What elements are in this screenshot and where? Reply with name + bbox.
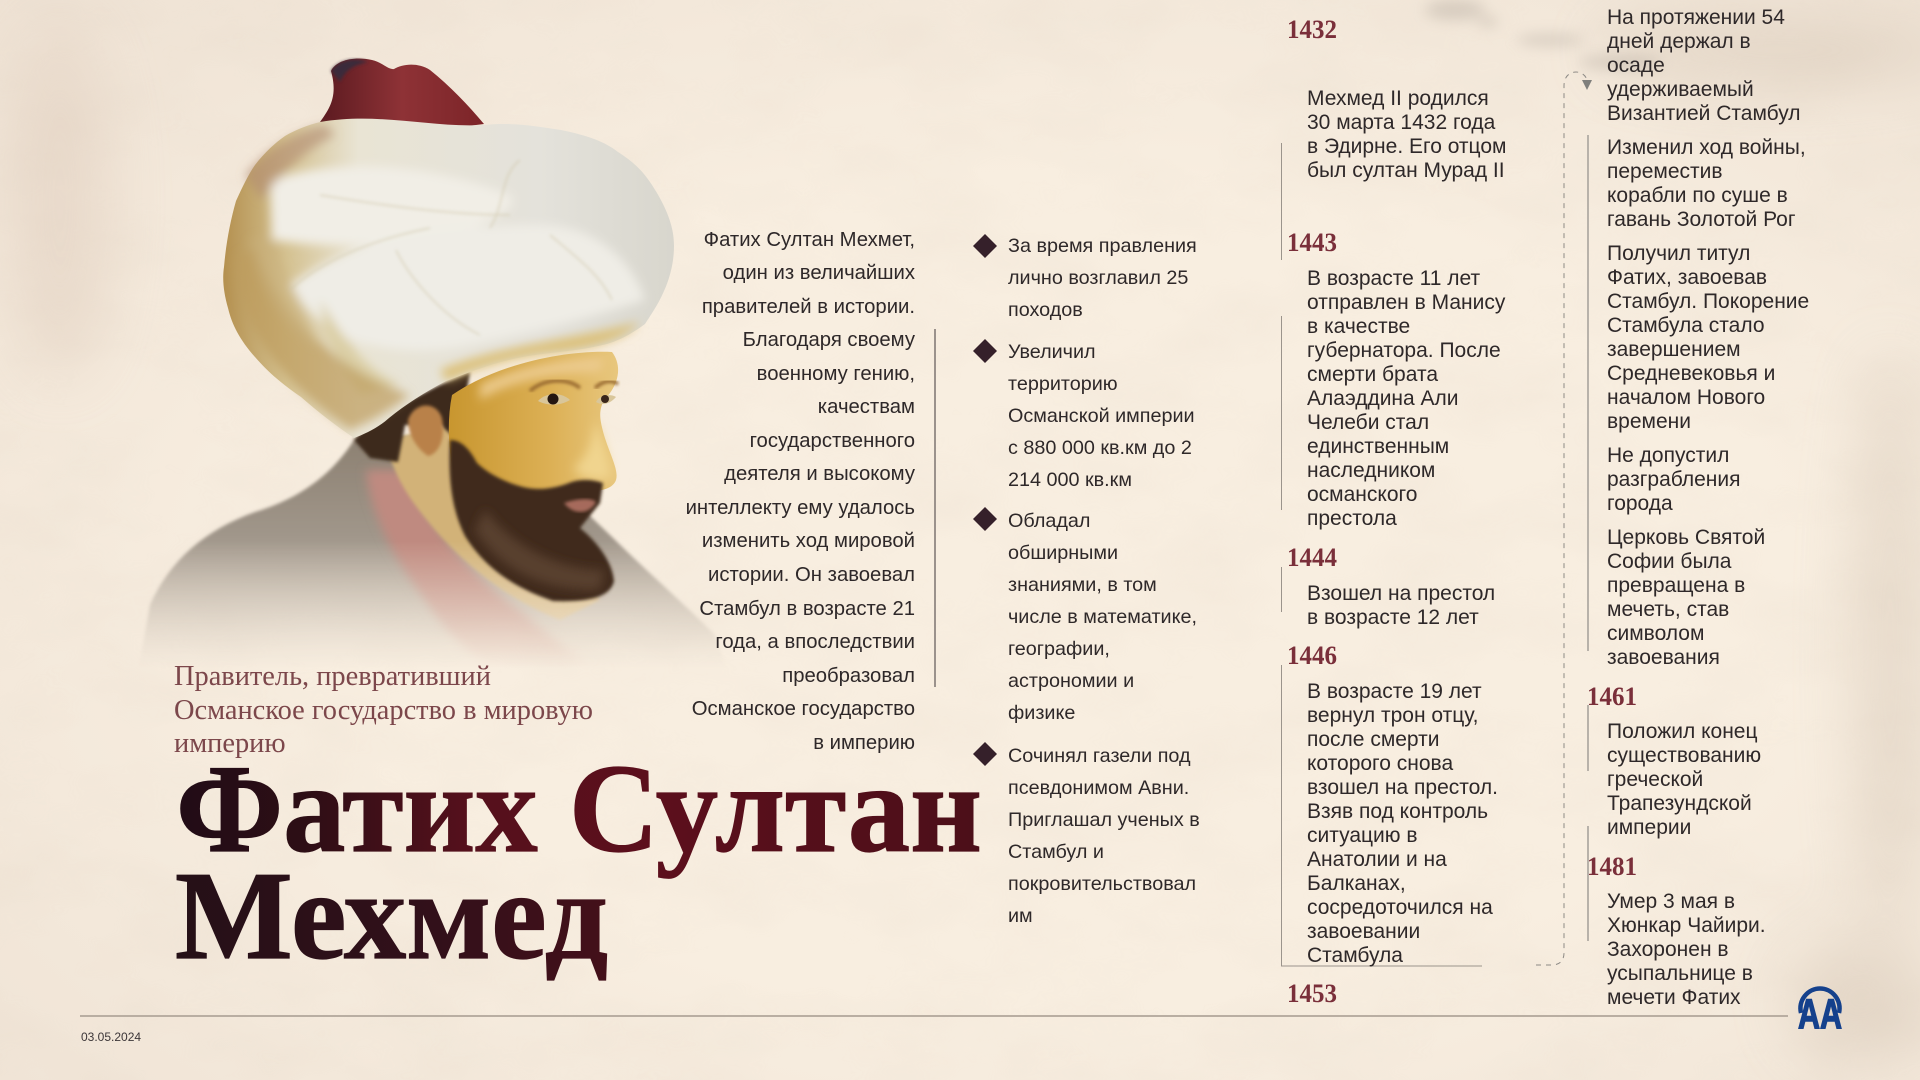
timeline column 2: империи — [1607, 816, 1691, 839]
beard — [450, 440, 614, 601]
bullet 2: территорию — [1008, 373, 1118, 395]
title text: Фатих, завоевав — [1607, 266, 1767, 289]
hat — [320, 58, 484, 132]
timeline column 2 — [1587, 6, 1809, 1009]
intro text: государственного — [750, 430, 915, 452]
subtitle: Османское государство в мировую — [174, 695, 593, 726]
timeline column 1: Балканах, — [1307, 872, 1406, 895]
timeline column 2: Положил конец — [1607, 720, 1758, 743]
intro text: истории. Он завоевал — [708, 564, 915, 586]
hagia sophia text: Софии была — [1607, 550, 1731, 573]
timeline column 1: которого снова — [1307, 752, 1453, 775]
timeline column 1: Челеби стал — [1307, 411, 1429, 434]
bullet 3: географии, — [1008, 638, 1110, 660]
title text — [1607, 242, 1809, 433]
siege text: На протяжении 54 — [1607, 6, 1785, 29]
bullet 3: числе в математике, — [1008, 606, 1197, 628]
timeline column 1: В возрасте 19 лет — [1307, 680, 1482, 703]
title text: Стамбул. Покорение — [1607, 290, 1809, 313]
intro text: Фатих Султан Мехмет, — [704, 228, 915, 250]
timeline column 2: мечети Фатих — [1607, 986, 1741, 1009]
hagia sophia text: завоевания — [1607, 646, 1720, 669]
intro text: Османское государство — [692, 698, 915, 720]
siege text: Византией Стамбул — [1607, 102, 1801, 125]
title: Мехмед — [175, 847, 608, 986]
title: Фатих Султан — [176, 740, 982, 879]
timeline column 1: ситуацию в — [1307, 824, 1418, 847]
timeline column 2: Умер 3 мая в — [1607, 890, 1735, 913]
timeline column 1: Стамбула — [1307, 944, 1403, 967]
timeline column 1: престола — [1307, 507, 1397, 530]
bullet 3 — [973, 507, 1197, 724]
timeline column 2: существованию — [1607, 744, 1761, 767]
bullet 3: физике — [1008, 702, 1075, 724]
dashed arrow — [1536, 72, 1592, 965]
timeline column 2: греческой — [1607, 768, 1703, 791]
eyes — [530, 381, 618, 405]
year 1432: 1432 — [1287, 15, 1337, 44]
timeline column 1: Взяв под контроль — [1307, 800, 1488, 823]
title text: времени — [1607, 410, 1691, 433]
turban — [223, 119, 674, 438]
date: 03.05.2024 — [81, 1030, 141, 1044]
timeline column 1: в Эдирне. Его отцом — [1307, 135, 1506, 158]
intro text — [686, 228, 915, 754]
bullet 3: знаниями, в том — [1008, 574, 1157, 596]
portrait: sultan in turban — [145, 57, 716, 658]
intro text: преобразовал — [782, 665, 915, 687]
intro text: Стамбул в возрасте 21 — [699, 598, 915, 620]
title text: Получил титул — [1607, 242, 1750, 265]
bullet 4: им — [1008, 905, 1033, 927]
bullet 4: покровительствовал — [1008, 873, 1196, 895]
year 1444: 1444 — [1287, 543, 1337, 572]
bullet 4 — [973, 742, 1200, 927]
robe — [145, 426, 716, 658]
intro text: правителей в истории. — [702, 296, 915, 318]
timeline column 1: в возрасте 12 лет — [1307, 606, 1479, 629]
timeline column 2: Захоронен в — [1607, 938, 1729, 961]
looting text: разграбления — [1607, 468, 1740, 491]
timeline column 1: 30 марта 1432 года — [1307, 111, 1495, 134]
hagia sophia text — [1607, 526, 1765, 669]
lips — [564, 499, 596, 512]
timeline column 1: Взошел на престол — [1307, 582, 1495, 605]
ships text: корабли по суше в — [1607, 184, 1788, 207]
timeline column 1: смерти брата — [1307, 363, 1438, 386]
year 1446: 1446 — [1287, 641, 1337, 670]
looting text — [1607, 444, 1740, 515]
timeline column 1: после смерти — [1307, 728, 1440, 751]
timeline column 1: завоевании — [1307, 920, 1420, 943]
bullet 2: с 880 000 кв.км до 2 — [1008, 437, 1192, 459]
siege text — [1607, 6, 1801, 125]
timeline column 2: усыпальнице в — [1607, 962, 1753, 985]
timeline column 1: сосредоточился на — [1307, 896, 1493, 919]
looting text: Не допустил — [1607, 444, 1729, 467]
timeline column 1: единственным — [1307, 435, 1449, 458]
bullet 3: астрономии и — [1008, 670, 1134, 692]
intro text: года, а впоследствии — [715, 631, 915, 653]
subtitle — [174, 661, 593, 759]
intro text: в империю — [813, 732, 915, 754]
timeline column 1: отправлен в Манису — [1307, 291, 1505, 314]
subtitle: Правитель, превративший — [174, 661, 491, 692]
hagia sophia text: превращена в — [1607, 574, 1745, 597]
intro text: один из величайших — [723, 262, 915, 284]
intro text: деятеля и высокому — [724, 463, 915, 485]
timeline column 1: османского — [1307, 483, 1417, 506]
hair — [354, 372, 470, 462]
bullet 1: походов — [1008, 299, 1083, 321]
intro text: качествам — [818, 396, 915, 418]
year 1461: 1461 — [1587, 682, 1637, 711]
timeline column 1: Алаэддина Али — [1307, 387, 1459, 410]
timeline column 2: Хюнкар Чайири. — [1607, 914, 1766, 937]
year 1453: 1453 — [1287, 979, 1337, 1008]
siege text: удерживаемый — [1607, 78, 1754, 101]
hagia sophia text: символом — [1607, 622, 1704, 645]
timeline column 1 — [1287, 15, 1506, 1008]
timeline column 1: наследником — [1307, 459, 1435, 482]
siege text: осаде — [1607, 54, 1665, 77]
timeline column 1: Анатолии и на — [1307, 848, 1447, 871]
bullet 1: лично возглавил 25 — [1008, 267, 1188, 289]
hagia sophia text: Церковь Святой — [1607, 526, 1765, 549]
ships text: переместив — [1607, 160, 1723, 183]
ships text: гавань Золотой Рог — [1607, 208, 1796, 231]
intro text: интеллекту ему удалось — [686, 497, 915, 519]
face — [449, 352, 618, 540]
bullet 2: Увеличил — [1008, 341, 1096, 363]
bullet 2: 214 000 кв.км — [1008, 469, 1132, 491]
bullet 2: Османской империи — [1008, 405, 1195, 427]
looting text: города — [1607, 492, 1673, 515]
bullet 4: Стамбул и — [1008, 841, 1104, 863]
year 1443: 1443 — [1287, 228, 1337, 257]
bullet 4: псевдонимом Авни. — [1008, 777, 1189, 799]
timeline column 1: взошел на престол. — [1307, 776, 1498, 799]
bullet 1 — [973, 234, 1197, 321]
ships text: Изменил ход войны, — [1607, 136, 1806, 159]
title text: завершением — [1607, 338, 1741, 361]
intro text: военному гению, — [757, 363, 915, 385]
ear — [408, 405, 443, 456]
bullet 2 — [973, 339, 1195, 491]
hagia sophia text: мечеть, став — [1607, 598, 1729, 621]
siege text: дней держал в — [1607, 30, 1751, 53]
timeline column 1: В возрасте 11 лет — [1307, 267, 1480, 290]
title text: Стамбула стало — [1607, 314, 1765, 337]
intro text: Благодаря своему — [743, 329, 915, 351]
bullet 1: За время правления — [1008, 235, 1197, 257]
timeline column 1: был султан Мурад II — [1307, 159, 1505, 182]
timeline column 1: в качестве — [1307, 315, 1410, 338]
timeline column 1: Мехмед II родился — [1307, 87, 1489, 110]
bullet 3: обширными — [1008, 542, 1118, 564]
bullet 4: Сочинял газели под — [1008, 745, 1191, 767]
title text: Средневековья и — [1607, 362, 1775, 385]
timeline column 1: вернул трон отцу, — [1307, 704, 1479, 727]
timeline column 2: Трапезундской — [1607, 792, 1752, 815]
year 1481: 1481 — [1587, 852, 1637, 881]
bullet list — [973, 234, 1200, 927]
title text: началом Нового — [1607, 386, 1765, 409]
subtitle: империю — [174, 728, 286, 759]
intro text: изменить ход мировой — [702, 530, 915, 552]
bullet 3: Обладал — [1008, 510, 1090, 532]
timeline column 1: губернатора. После — [1307, 339, 1501, 362]
bullet 4: Приглашал ученых в — [1008, 809, 1200, 831]
ships text — [1607, 136, 1806, 231]
turban folds — [235, 125, 645, 430]
